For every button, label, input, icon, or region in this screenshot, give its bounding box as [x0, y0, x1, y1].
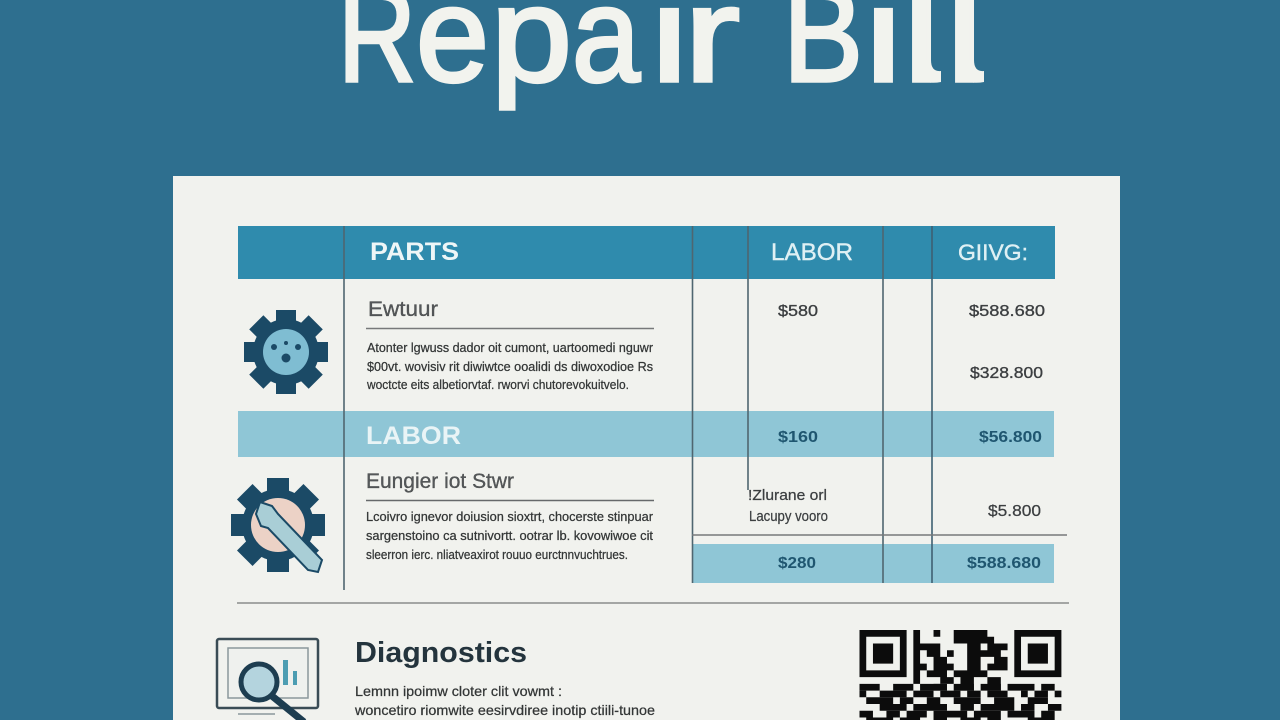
parts item text: Ewtuur [368, 298, 438, 321]
title [338, 0, 984, 110]
labor band [238, 411, 1054, 457]
parts item text: woctcte eits albetiorvtaf. rworvi chutorevokuitvelo. [366, 377, 629, 392]
labor amounts: $5.800 [988, 503, 1041, 520]
parts amounts [778, 303, 1045, 382]
table header bar [238, 226, 1055, 279]
labor item text: Lcoivro ignevor doiusion sioxtrt, chocerste stinpuar [366, 509, 654, 524]
labor item text: Eungier iot Stwr [366, 470, 514, 493]
parts amounts: $588.680 [969, 303, 1045, 320]
labor band: $56.800 [979, 429, 1042, 446]
icon: parts gear [244, 310, 328, 394]
labor item text: sleerron ierc. nliatveaxirot rouuo eurctnnvuchtrues. [366, 547, 628, 562]
parts item text [366, 298, 654, 392]
diagnostics text [354, 683, 655, 718]
diagnostics text: woncetiro riomwite eesirvdiree inotip ctiili-tunoe [354, 702, 655, 718]
total band: $588.680 [967, 555, 1041, 572]
table header bar: PARTS [370, 238, 459, 266]
labor band: LABOR [366, 422, 461, 450]
total band: $280 [778, 555, 816, 572]
icon: diagnostics monitor and magnifier [217, 639, 318, 720]
labor amounts [748, 487, 1041, 525]
icon: labor gear with wrench [231, 478, 325, 572]
panel: invoice card [173, 176, 1120, 720]
table header bar: LABOR [771, 239, 853, 266]
total band [692, 544, 1054, 583]
labor amounts: Lacupy vooro [749, 508, 828, 525]
parts item text: Atonter lgwuss dador oit cumont, uartoomedi nguwr [367, 340, 654, 355]
diagnostics heading: Diagnostics [355, 637, 527, 669]
table grid lines [237, 226, 1069, 603]
table header bar: GIIVG: [958, 240, 1028, 265]
diagnostics text: Lemnn ipoimw cloter clit vowmt : [355, 683, 562, 699]
parts amounts: $580 [778, 303, 818, 320]
parts amounts: $328.800 [970, 365, 1043, 382]
icon: QR code [860, 630, 1061, 720]
labor amounts: !Zlurane orl [748, 487, 827, 504]
parts item text: $00vt. wovisiv rit diwiwtce ooalidi ds diwoxodioe Rs [367, 359, 653, 374]
labor item text [366, 470, 654, 562]
labor band: $160 [778, 429, 818, 446]
labor item text: sargenstoino ca sutnivortt. ootrar lb. kovowiwoe cit [366, 528, 653, 543]
